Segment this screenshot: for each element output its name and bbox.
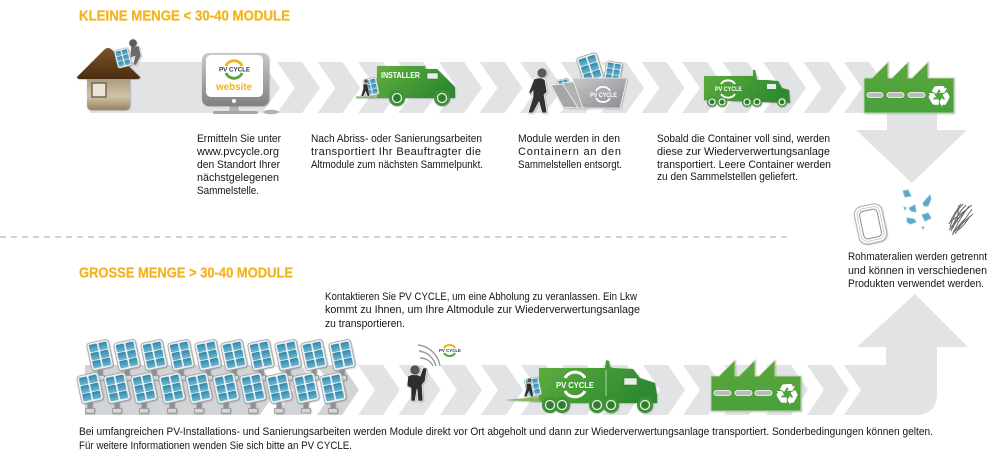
icon: large PV CYCLE truck: PV CYCLE (556, 380, 594, 390)
text: step 1: nächstgelegenen (197, 172, 279, 184)
top process band arrow (90, 62, 887, 113)
text: step 4: transportiert. Leere Container werden (657, 159, 831, 171)
heading: kleine Menge: KLEINE MENGE < 30-40 MODULE (79, 8, 290, 24)
text: step 2: transportiert Ihr Beauftragter die (311, 146, 481, 158)
text: large-scale footnote: Für weitere Informationen wenden Sie sich bitte an PV CYCLE. (79, 440, 352, 452)
text: step 1 (196, 133, 281, 197)
text: raw materials: Produkten verwendet werden. (848, 278, 984, 290)
text: contact PV CYCLE: zu transportieren. (325, 318, 405, 330)
text: step 3: Sammelstellen entsorgt. (518, 159, 622, 171)
icon: recycling factory top (864, 62, 954, 113)
text: large-scale footnote (79, 426, 933, 452)
text: contact PV CYCLE: kommt zu Ihnen, um Ihre Altmodule zur Wiederverwertungsanlage (325, 304, 640, 316)
text: large-scale footnote: Bei umfangreichen PV-Installations- und Sanierungsarbeiten werden Module direkt vor Ort abgeholt und dann zur Wiederverwertungsanlage transportiert. Sonderbedingungen können gelten. (79, 426, 933, 438)
text: contact PV CYCLE: Kontaktieren Sie PV CYCLE, um eine Abholung zu veranlassen. Ein Lkw (325, 291, 637, 303)
logo: PV CYCLE small: PV CYCLE (439, 348, 461, 353)
text: step 1: den Standort Ihrer (197, 159, 280, 171)
text: step 1: Ermitteln Sie unter (197, 133, 281, 145)
text: step 2: Nach Abriss- oder Sanierungsarbeiten (311, 133, 482, 145)
text: step 3: Module werden in den (518, 133, 620, 145)
icon: container truck (704, 70, 790, 107)
icon: recycling factory bottom (711, 360, 801, 411)
icon: large PV CYCLE truck (505, 360, 657, 413)
text: step 3: Containern an den (518, 146, 621, 158)
text: step 4: Sobald die Container voll sind, werden (657, 133, 830, 145)
up arrow from bottom band (844, 294, 968, 415)
text: step 2: Altmodule zum nächsten Sammelpunkt. (311, 159, 483, 171)
heading: grosse Menge: GROSSE MENGE > 30-40 MODULE (79, 264, 293, 282)
text: step 1: Sammelstelle. (197, 185, 259, 197)
text: raw materials: Rohmateralien werden getrennt (848, 251, 987, 263)
icon: glass shards (903, 190, 931, 229)
text: step 4: zu den Sammelstellen geliefert. (657, 171, 798, 183)
text: step 3 (518, 133, 622, 171)
icon: house with installer on roof (77, 39, 141, 110)
text: raw materials: und können in verschiedenen (848, 265, 987, 277)
icon: installer truck (356, 66, 455, 106)
icon: container truck: PV CYCLE (715, 87, 742, 93)
icon: monitor with PV CYCLE website: website (215, 82, 252, 93)
text: step 2 (311, 133, 483, 171)
text: step 4: diese zur Wiederverwertungsanlage (657, 146, 830, 158)
text: step 1: www.pvcycle.org (196, 146, 279, 158)
icon: person and containers with modules: PV CYCLE (590, 93, 617, 99)
down arrow to raw materials (856, 113, 967, 183)
icon: monitor with PV CYCLE website (202, 53, 279, 114)
logo: PV CYCLE on monitor: PV CYCLE (219, 68, 250, 74)
icon: person on phone with signal (407, 345, 461, 401)
icon: walking person (528, 68, 547, 113)
icon: person and containers with modules (528, 52, 627, 113)
bottom process band arrow (85, 365, 849, 415)
icon: installer truck: INSTALLER (381, 71, 420, 80)
icon: aluminium frame (853, 203, 888, 245)
solar panel array (76, 339, 356, 413)
icon: recycling factory bottom: ♻ (774, 378, 800, 411)
text: contact PV CYCLE (325, 291, 640, 330)
icon: recycling factory top: ♻ (926, 80, 952, 113)
icon: wire bundle (949, 204, 973, 235)
text: step 4 (657, 133, 831, 183)
text: raw materials (848, 251, 987, 290)
